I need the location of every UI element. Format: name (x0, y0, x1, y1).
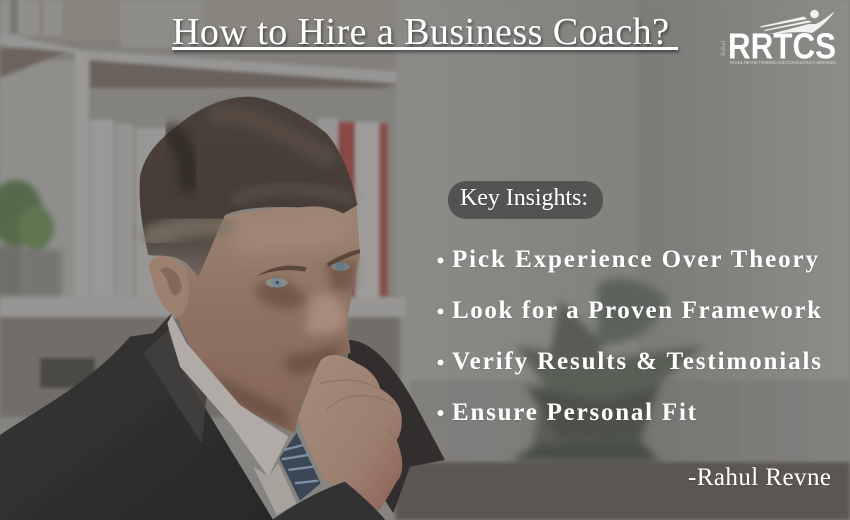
item 1: Pick Experience Over Theory (452, 246, 818, 273)
face shading (207, 258, 357, 430)
left-side plant (0, 180, 62, 296)
item 2: Look for a Proven Framework (452, 297, 821, 324)
item 3: Verify Results & Testimonials (452, 348, 821, 375)
title underline (172, 47, 678, 50)
mouth (298, 355, 327, 367)
hand on chin (298, 355, 402, 512)
shirt collar (167, 315, 288, 477)
eyebrows (257, 266, 307, 277)
eyes (266, 278, 288, 287)
logo tagline: RAHUL REVNE TRAINING AND CONSULTANCY SERVICES (730, 60, 836, 65)
wall behind shelves (405, 0, 640, 470)
logo signature: Rahul (720, 40, 727, 56)
right-side plant (510, 278, 705, 462)
key insights pill: Key Insights: (460, 185, 588, 211)
right shoulder (347, 340, 445, 513)
lapel (143, 330, 207, 443)
author credit: -Rahul Revne (688, 464, 831, 491)
hair (140, 97, 357, 277)
desk (395, 462, 850, 520)
logo swoosh icon (760, 10, 835, 34)
neck and face (177, 207, 360, 433)
hair highlights (153, 113, 350, 237)
title: How to Hire a Business Coach? (172, 11, 669, 53)
logo: RRTCS (720, 10, 836, 66)
bookshelf (0, 0, 410, 470)
item 4: Ensure Personal Fit (452, 399, 697, 426)
white books (90, 120, 114, 302)
tie (279, 433, 321, 501)
key insights pill (448, 181, 603, 219)
ear (148, 256, 189, 316)
man in suit (0, 97, 445, 520)
forehead highlight (230, 213, 350, 257)
logo wordmark: RRTCS (728, 26, 836, 66)
suit jacket (0, 313, 273, 520)
nose highlight (305, 293, 347, 335)
lower shelf (0, 297, 405, 317)
sleeve (270, 482, 387, 520)
key insights list (438, 246, 821, 426)
